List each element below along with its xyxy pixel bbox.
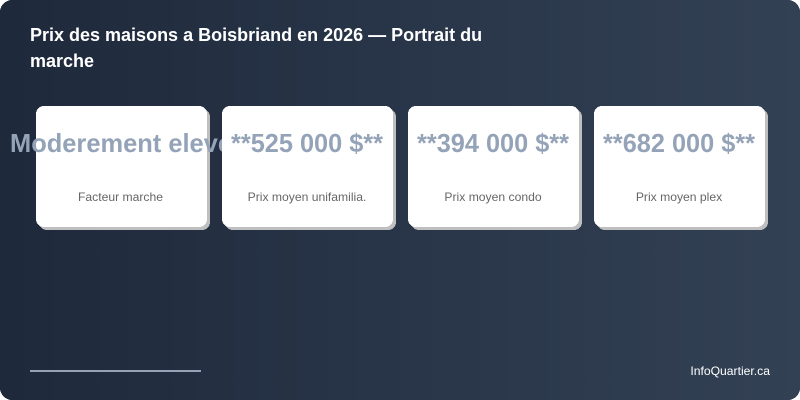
card: prix moyen plex: [594, 106, 768, 230]
card: prix moyen condo: [408, 106, 582, 230]
card: prix moyen condo: **394 000 $**: [417, 128, 570, 158]
title: Prix des maisons a Boisbriand en 2026 — Portrait du: [30, 25, 482, 45]
card: facteur marche: [10, 106, 232, 230]
card: prix moyen plex: **682 000 $**: [603, 128, 756, 158]
title: [30, 25, 482, 71]
card: prix moyen unifamilial: [222, 106, 396, 230]
title: marche: [30, 51, 94, 71]
card: prix moyen plex: Prix moyen plex: [636, 190, 722, 204]
footer brand: InfoQuartier.ca: [690, 364, 770, 378]
card: facteur marche: Moderement eleve: [10, 128, 232, 158]
card: prix moyen unifamilial: Prix moyen unifamilia.: [248, 190, 366, 204]
card: facteur marche: Facteur marche: [78, 190, 163, 204]
footer accent line: [30, 370, 201, 372]
card: prix moyen condo: Prix moyen condo: [444, 190, 542, 204]
card: prix moyen unifamilial: **525 000 $**: [231, 128, 384, 158]
